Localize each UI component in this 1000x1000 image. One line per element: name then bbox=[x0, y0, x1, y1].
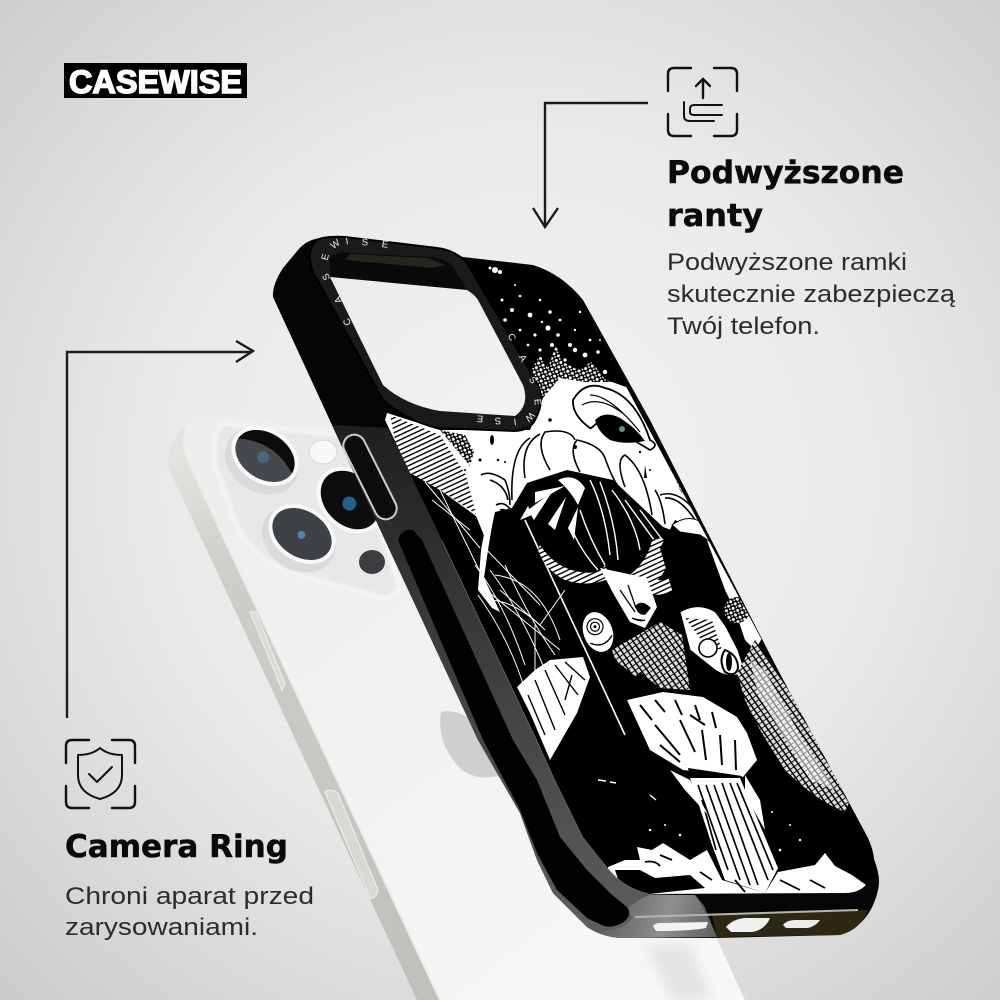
eye shell lines bbox=[582, 395, 640, 432]
icon: raised edges bbox=[668, 68, 737, 136]
lens: right bbox=[303, 453, 397, 547]
white phone bbox=[167, 412, 745, 1000]
right white strip bbox=[708, 540, 762, 646]
bottom white ground bbox=[608, 843, 880, 900]
left dashes bbox=[598, 780, 656, 800]
lens: lower bbox=[249, 490, 349, 586]
oval slit bbox=[726, 653, 732, 671]
black slot on band bbox=[398, 530, 629, 927]
long white line bbox=[525, 520, 625, 735]
ring text: S bbox=[526, 375, 539, 386]
oval eye bbox=[722, 650, 738, 674]
right horn tip bbox=[650, 578, 672, 595]
ring text: A bbox=[332, 294, 345, 305]
rock bbox=[517, 657, 590, 760]
heading: raised edges: Podwyższone bbox=[667, 155, 904, 191]
phone side band bbox=[167, 424, 440, 1000]
arrow: top bbox=[533, 103, 648, 227]
ground dark bbox=[615, 870, 705, 895]
ring text: S bbox=[362, 237, 368, 248]
action button bbox=[250, 612, 285, 690]
serpent white bbox=[750, 660, 835, 790]
ring inner wall bbox=[330, 252, 467, 290]
cluster hatching bbox=[685, 618, 722, 650]
text: raised edges bbox=[667, 249, 956, 340]
text: camera ring bbox=[65, 883, 314, 941]
lens: upper left bbox=[212, 412, 312, 508]
ring hole bbox=[330, 277, 525, 416]
right horn bbox=[630, 538, 666, 584]
ring text: I bbox=[513, 416, 517, 427]
white thick stroke bbox=[478, 518, 500, 612]
bottom soft shade bbox=[645, 945, 712, 1000]
logo: CASEWISE bbox=[69, 64, 242, 100]
volume button bbox=[325, 790, 378, 898]
art base bbox=[435, 526, 874, 894]
speaker hole right bbox=[783, 920, 820, 928]
ring body bbox=[310, 237, 541, 431]
heading: camera ring: Camera Ring bbox=[65, 829, 288, 865]
bottom specks bbox=[649, 811, 801, 851]
ring text: E bbox=[320, 253, 332, 262]
white upper mass bbox=[385, 378, 711, 544]
ring text: W bbox=[522, 409, 536, 423]
claws bbox=[520, 477, 585, 540]
text: camera ring: zarysowaniami. bbox=[65, 914, 258, 941]
dotted transition bbox=[530, 345, 611, 398]
ring text: E bbox=[381, 239, 389, 251]
speaker hole bbox=[653, 922, 708, 931]
face bbox=[600, 568, 657, 628]
bottom glossy end bbox=[598, 895, 717, 938]
eye shell bbox=[573, 386, 655, 450]
ring text: E bbox=[531, 398, 543, 406]
light line bbox=[635, 910, 858, 917]
ring text: C bbox=[505, 332, 518, 343]
ring text: A bbox=[516, 353, 529, 364]
rock lines bbox=[528, 662, 585, 735]
ring text: W bbox=[329, 238, 342, 252]
face strands bbox=[570, 480, 670, 570]
mushroom cap bbox=[627, 692, 757, 777]
drips bbox=[670, 770, 765, 830]
icon: shield bbox=[66, 740, 135, 808]
ring text: I bbox=[345, 236, 349, 247]
web lines bbox=[425, 482, 565, 690]
tooth lines bbox=[481, 431, 706, 535]
flash bbox=[309, 440, 337, 464]
lower translucent band bbox=[332, 425, 717, 938]
phone case bbox=[273, 238, 879, 938]
text: raised edges: Podwyższone ramki bbox=[667, 249, 907, 276]
ring text bbox=[320, 236, 543, 427]
inner edge line bbox=[442, 540, 650, 894]
text: raised edges: Twój telefon. bbox=[667, 313, 820, 340]
horn hatching bbox=[390, 415, 476, 514]
speckled top bbox=[488, 266, 613, 374]
mushroom trunk bbox=[690, 778, 778, 893]
side button bbox=[340, 431, 400, 523]
corner hatch bbox=[673, 474, 684, 496]
spiral shield bbox=[582, 612, 614, 652]
text: raised edges: skutecznie zabezpieczą bbox=[667, 281, 956, 308]
heading: raised edges line 2: ranty bbox=[667, 198, 763, 234]
eye highlight bbox=[619, 426, 625, 432]
white head cap bbox=[671, 518, 710, 542]
upper right black figure bbox=[660, 520, 726, 628]
bottom black bar bbox=[695, 880, 878, 915]
wall highlight bbox=[345, 254, 445, 268]
mushroom strokes bbox=[640, 700, 736, 770]
bottom olive bar bbox=[712, 910, 868, 937]
serpent bbox=[737, 640, 850, 812]
arrow: left bbox=[67, 341, 253, 718]
camera plateau bbox=[214, 424, 400, 598]
body drapery bbox=[612, 622, 690, 690]
ring text: S bbox=[495, 415, 501, 426]
phone back bbox=[167, 415, 745, 1000]
apple logo shadow bbox=[440, 711, 500, 778]
horn patch bbox=[440, 430, 474, 466]
ring text: C bbox=[341, 316, 354, 327]
ring text: E bbox=[477, 412, 484, 424]
splatter bbox=[464, 418, 651, 478]
printed artwork bbox=[370, 255, 890, 905]
hatched blob bbox=[724, 597, 750, 623]
face details bbox=[620, 585, 650, 621]
case body bbox=[273, 238, 879, 938]
side highlight bbox=[192, 470, 440, 1000]
triangle eye bbox=[699, 639, 717, 657]
port hole bbox=[726, 918, 770, 932]
eye bbox=[595, 414, 645, 443]
sensor bbox=[359, 550, 385, 574]
text: camera ring: Chroni aparat przed bbox=[65, 883, 314, 910]
trunk lines bbox=[698, 783, 773, 885]
right cluster bbox=[680, 607, 745, 676]
chest black bbox=[616, 661, 636, 690]
ground strokes bbox=[645, 855, 825, 892]
left horn bbox=[538, 545, 610, 584]
ring text: S bbox=[320, 271, 333, 282]
mushroom band bbox=[688, 768, 742, 782]
camera ring bbox=[310, 236, 543, 431]
